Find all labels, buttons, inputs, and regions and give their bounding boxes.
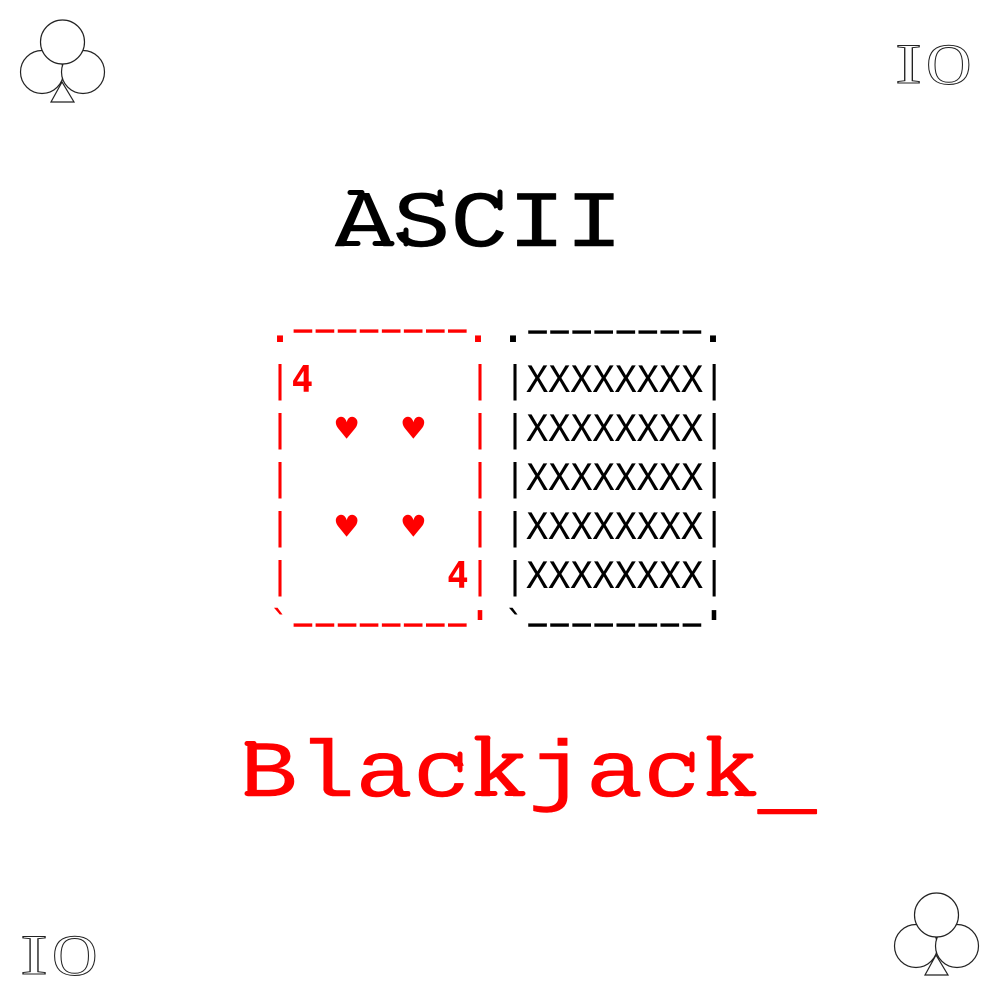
icon: IO bottom left: I xyxy=(20,923,48,987)
panel: red card: | 4| xyxy=(269,554,491,598)
title: Blackjack: Blackjack xyxy=(240,729,758,820)
panel: red card: | ♥ ♥ | xyxy=(269,407,491,451)
panel: black face-down card: ' xyxy=(703,603,725,646)
panel: red card: . xyxy=(467,308,489,351)
panel: red card: -------- xyxy=(282,307,466,350)
icon: IO top right: O xyxy=(926,33,971,97)
panel: black face-down card: |XXXXXXXX| xyxy=(504,505,725,549)
panel: black face-down card: |XXXXXXXX| xyxy=(504,407,725,451)
panel: black face-down card: . xyxy=(502,308,524,351)
title: Blackjack: _ xyxy=(757,738,817,829)
panel: black face-down card: ` xyxy=(504,603,526,646)
panel: red card: |4 | xyxy=(269,358,491,402)
panel: black face-down card: -------- xyxy=(517,308,701,351)
panel: red card: | | xyxy=(269,456,491,500)
panel: red card xyxy=(269,307,491,646)
panel: red card: ` xyxy=(269,603,291,646)
panel: red card: ' xyxy=(469,603,491,646)
icon: club bottom right xyxy=(894,893,978,975)
panel: black face-down card: . xyxy=(702,308,724,351)
panel: black face-down card: |XXXXXXXX| xyxy=(504,456,725,500)
title: ASCII: ASCII xyxy=(335,179,623,270)
panel: black face-down card xyxy=(502,308,725,646)
panel: black face-down card: -------- xyxy=(517,601,701,644)
icon: IO bottom left: O xyxy=(52,924,97,988)
panel: red card: . xyxy=(269,308,291,351)
panel: black face-down card: |XXXXXXXX| xyxy=(504,358,725,402)
icon: IO top right: I xyxy=(895,33,922,96)
icon: IO top right xyxy=(895,33,971,97)
panel: red card: -------- xyxy=(282,601,466,644)
icon: club top left xyxy=(20,20,104,102)
panel: red card: | ♥ ♥ | xyxy=(269,505,491,549)
icon: IO bottom left xyxy=(20,923,97,988)
panel: black face-down card: |XXXXXXXX| xyxy=(504,554,725,598)
